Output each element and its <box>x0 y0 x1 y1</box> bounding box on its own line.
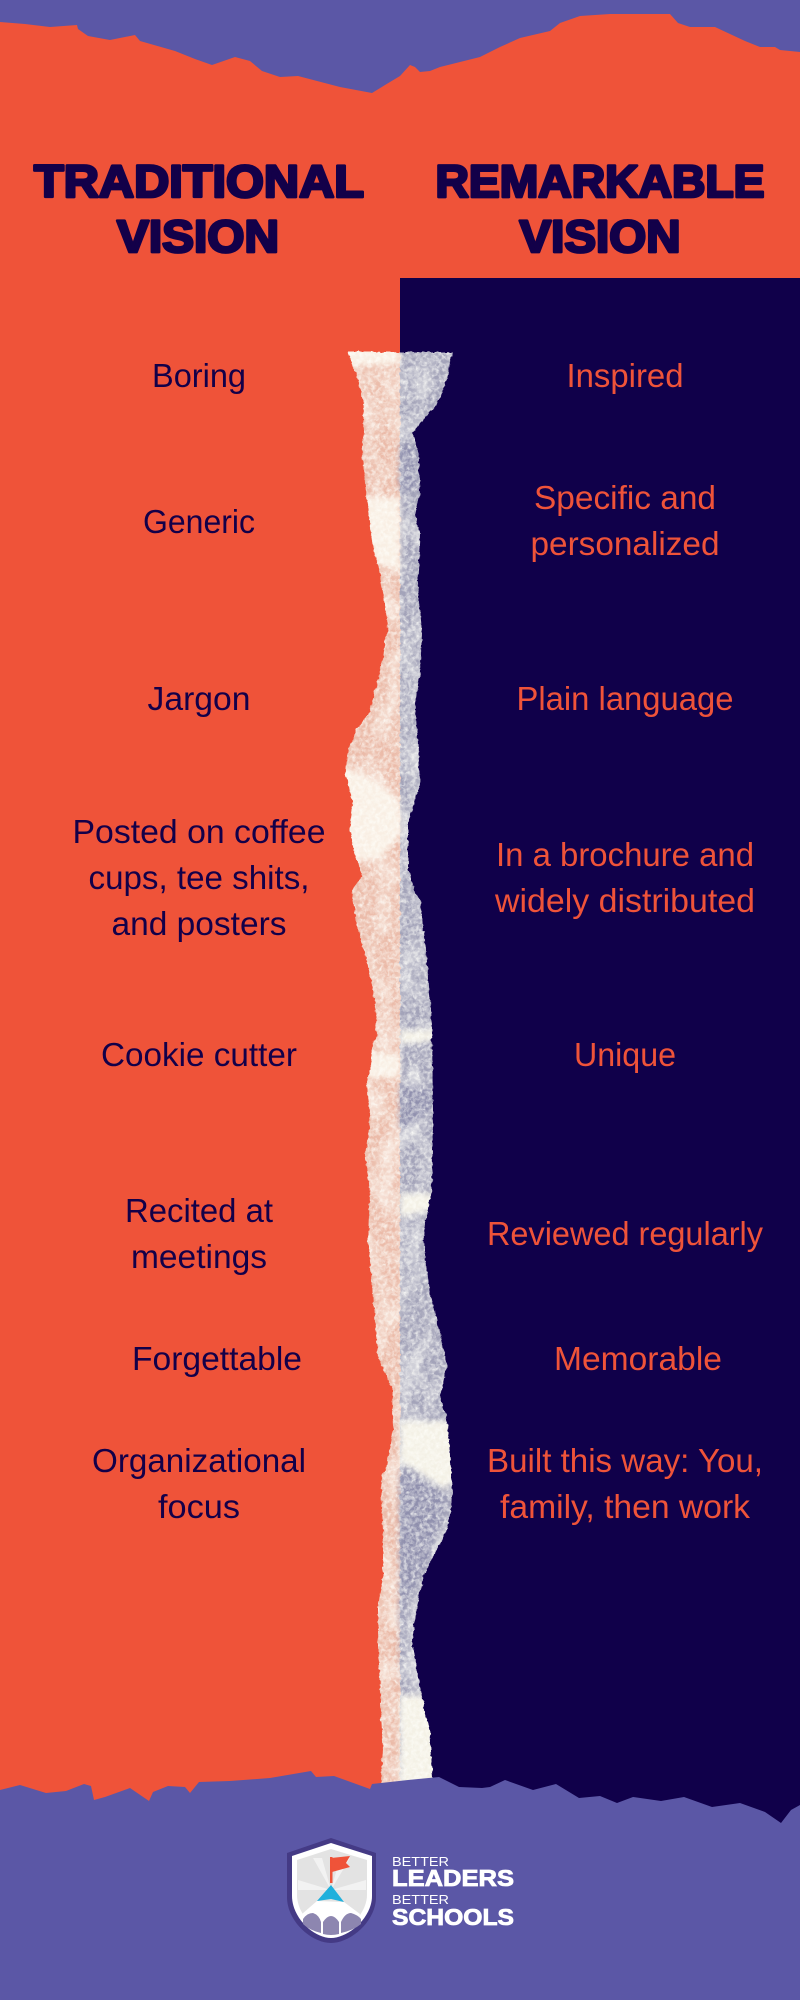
list: remarkable vision traits: family, then work <box>500 1488 751 1525</box>
list: remarkable vision traits: widely distributed <box>494 882 755 919</box>
torn paper strip <box>344 350 453 1783</box>
list: remarkable vision traits: Plain language <box>516 680 734 717</box>
list: traditional vision traits: focus <box>158 1488 240 1525</box>
list: traditional vision traits <box>72 357 326 1525</box>
list: remarkable vision traits: Reviewed regularly <box>487 1215 763 1252</box>
list: traditional vision traits: Cookie cutter <box>101 1036 297 1073</box>
list: traditional vision traits: Generic <box>143 503 255 540</box>
list: traditional vision traits: cups, tee shits, <box>88 859 310 896</box>
heading: remarkable vision <box>436 156 764 262</box>
wordmark: SCHOOLS <box>392 1904 514 1930</box>
list: traditional vision traits: Boring <box>152 357 246 394</box>
heading: traditional vision: TRADITIONAL <box>34 156 364 207</box>
list: traditional vision traits: and posters <box>112 905 286 942</box>
wordmark: BETTER <box>392 1854 449 1869</box>
torn top edge <box>0 0 800 93</box>
logo: Better Leaders Better Schools <box>287 1838 514 1943</box>
wordmark: LEADERS <box>392 1865 514 1891</box>
list: remarkable vision traits: Specific and <box>534 479 716 516</box>
list: remarkable vision traits: Inspired <box>566 357 684 394</box>
list: traditional vision traits: Organizational <box>92 1442 306 1479</box>
torn bottom band <box>0 1771 800 2000</box>
heading: remarkable vision: VISION <box>520 211 680 262</box>
list: remarkable vision traits: personalized <box>530 525 720 562</box>
list: remarkable vision traits: In a brochure and <box>496 836 754 873</box>
heading: remarkable vision: REMARKABLE <box>436 156 764 207</box>
list: remarkable vision traits: Memorable <box>554 1340 722 1377</box>
list: remarkable vision traits: Unique <box>574 1036 676 1073</box>
list: traditional vision traits: Forgettable <box>132 1340 302 1377</box>
list: traditional vision traits: Recited at <box>125 1192 273 1229</box>
heading: traditional vision: VISION <box>117 211 279 262</box>
panel: remarkable navy column <box>400 278 800 1878</box>
wordmark: BETTER <box>392 1892 449 1907</box>
list: traditional vision traits: Posted on coffee <box>72 813 326 850</box>
list: remarkable vision traits <box>487 357 763 1525</box>
list: traditional vision traits: meetings <box>131 1238 267 1275</box>
list: remarkable vision traits: Built this way: You, <box>487 1442 763 1479</box>
list: traditional vision traits: Jargon <box>148 680 250 717</box>
heading: traditional vision <box>34 156 364 262</box>
wordmark <box>392 1854 514 1930</box>
icon: shield with flag and pencil <box>287 1838 376 1943</box>
